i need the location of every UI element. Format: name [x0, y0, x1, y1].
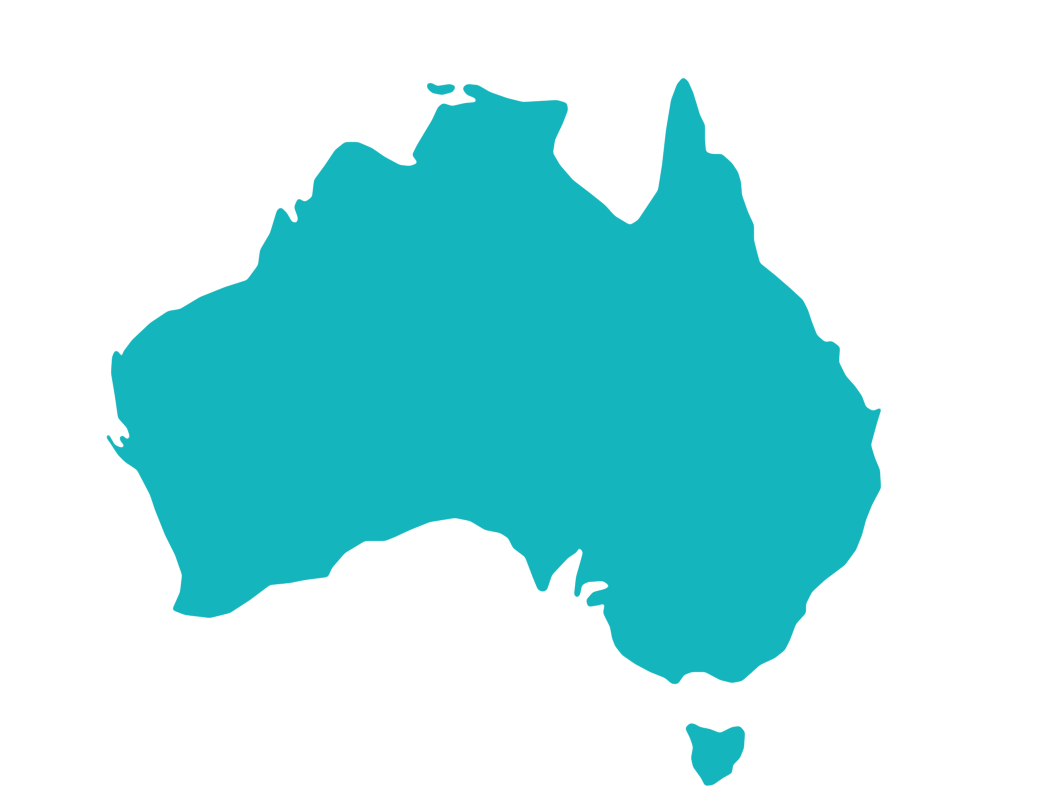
Tasmania [685, 723, 745, 786]
Melville Island [427, 83, 456, 95]
mainland Australia [106, 77, 882, 684]
